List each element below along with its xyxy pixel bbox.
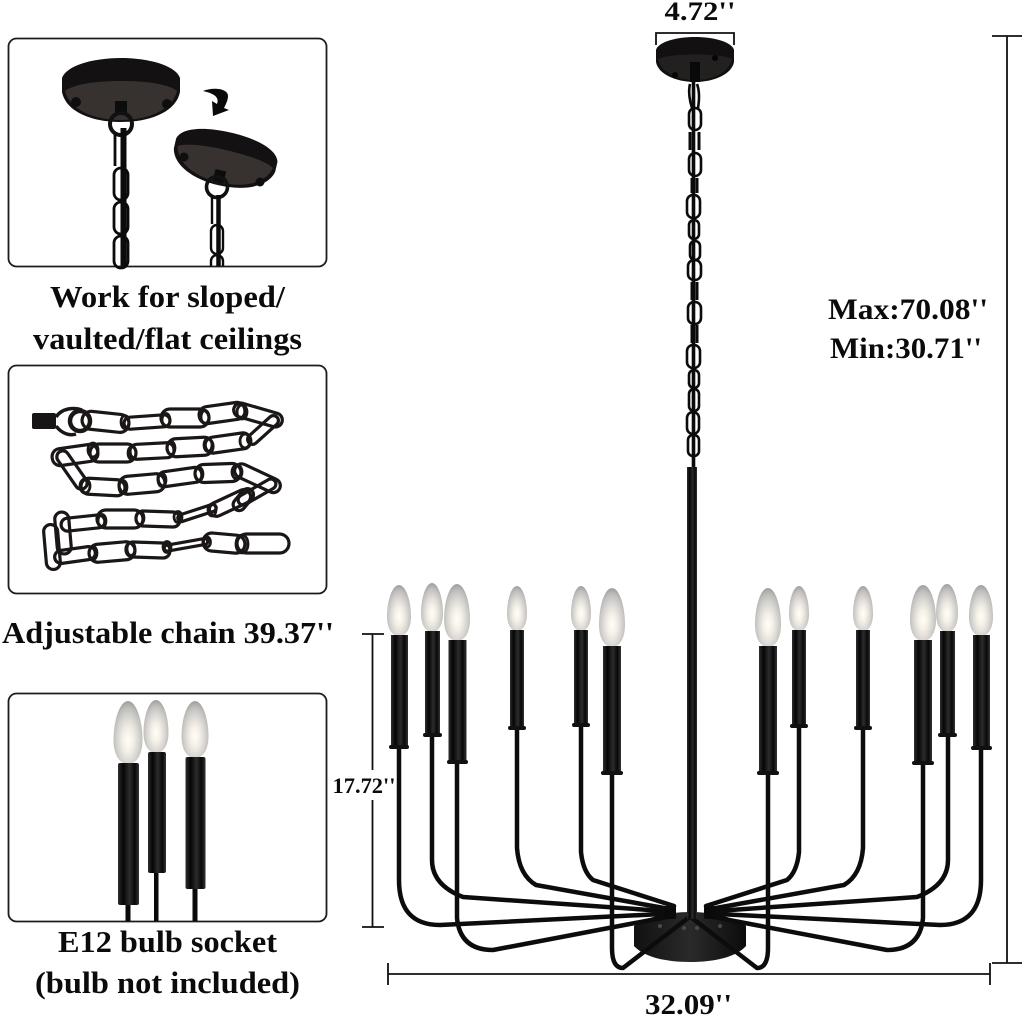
panel: sloped ceiling canopies <box>8 38 326 279</box>
icon: hub <box>634 912 746 962</box>
heading: socket caption: (bulb not included) <box>35 965 300 1000</box>
icon: central rod <box>687 467 697 919</box>
icon: candle 6 <box>599 588 625 775</box>
heading: socket caption: E12 bulb socket <box>58 924 278 959</box>
icon: arms <box>399 726 981 968</box>
icon: flat canopy <box>62 58 180 135</box>
icon: candles left side <box>387 583 625 775</box>
icon: candle 10 <box>910 585 936 765</box>
icon: tilted canopy <box>168 121 282 198</box>
icon: candle 2 <box>421 583 443 737</box>
icon: middle candle <box>144 700 168 921</box>
dimension: total height: Max:70.08'' <box>828 293 988 326</box>
icon: candle 3 <box>444 584 470 764</box>
dimension: total width <box>388 963 990 1018</box>
icon: left candle <box>114 701 142 921</box>
heading: ceilings caption <box>33 279 302 356</box>
heading: ceilings caption: vaulted/flat ceilings <box>33 321 302 356</box>
icon: chain below flat canopy <box>114 128 128 268</box>
heading: socket caption <box>35 924 300 1000</box>
icon: hanging chain <box>687 82 701 467</box>
dimension: body height <box>332 634 396 927</box>
dimension: total height <box>828 36 1022 963</box>
dimension: body height: 17.72'' <box>332 773 396 798</box>
icon: chain below tilted canopy <box>211 195 223 279</box>
panel: E12 bulb socket <box>8 694 326 922</box>
icon: ceiling canopy <box>656 37 734 82</box>
icon: candles right side <box>755 584 993 775</box>
icon: right candle <box>182 701 208 921</box>
icon: candle 11 <box>936 584 958 737</box>
icon: hub mounts <box>658 906 722 930</box>
icon: candle 12 <box>969 585 993 750</box>
icon: candle 5 <box>571 586 591 727</box>
icon: candle 7 <box>755 588 781 775</box>
icon: candle 9 <box>853 586 873 730</box>
heading: ceilings caption: Work for sloped/ <box>50 279 285 314</box>
icon: tilt arrow <box>203 89 229 116</box>
icon: candle 4 <box>507 586 527 730</box>
icon: coiled chain <box>32 401 289 570</box>
chart: chandelier <box>387 37 993 968</box>
icon: candle 8 <box>789 586 809 728</box>
icon: candle 1 <box>387 585 411 749</box>
dimension: total height: Min:30.71'' <box>830 332 982 365</box>
panel: adjustable chain <box>8 366 326 594</box>
dimension: canopy width <box>656 0 736 45</box>
heading: chain caption: Adjustable chain 39.37'' <box>2 615 334 650</box>
